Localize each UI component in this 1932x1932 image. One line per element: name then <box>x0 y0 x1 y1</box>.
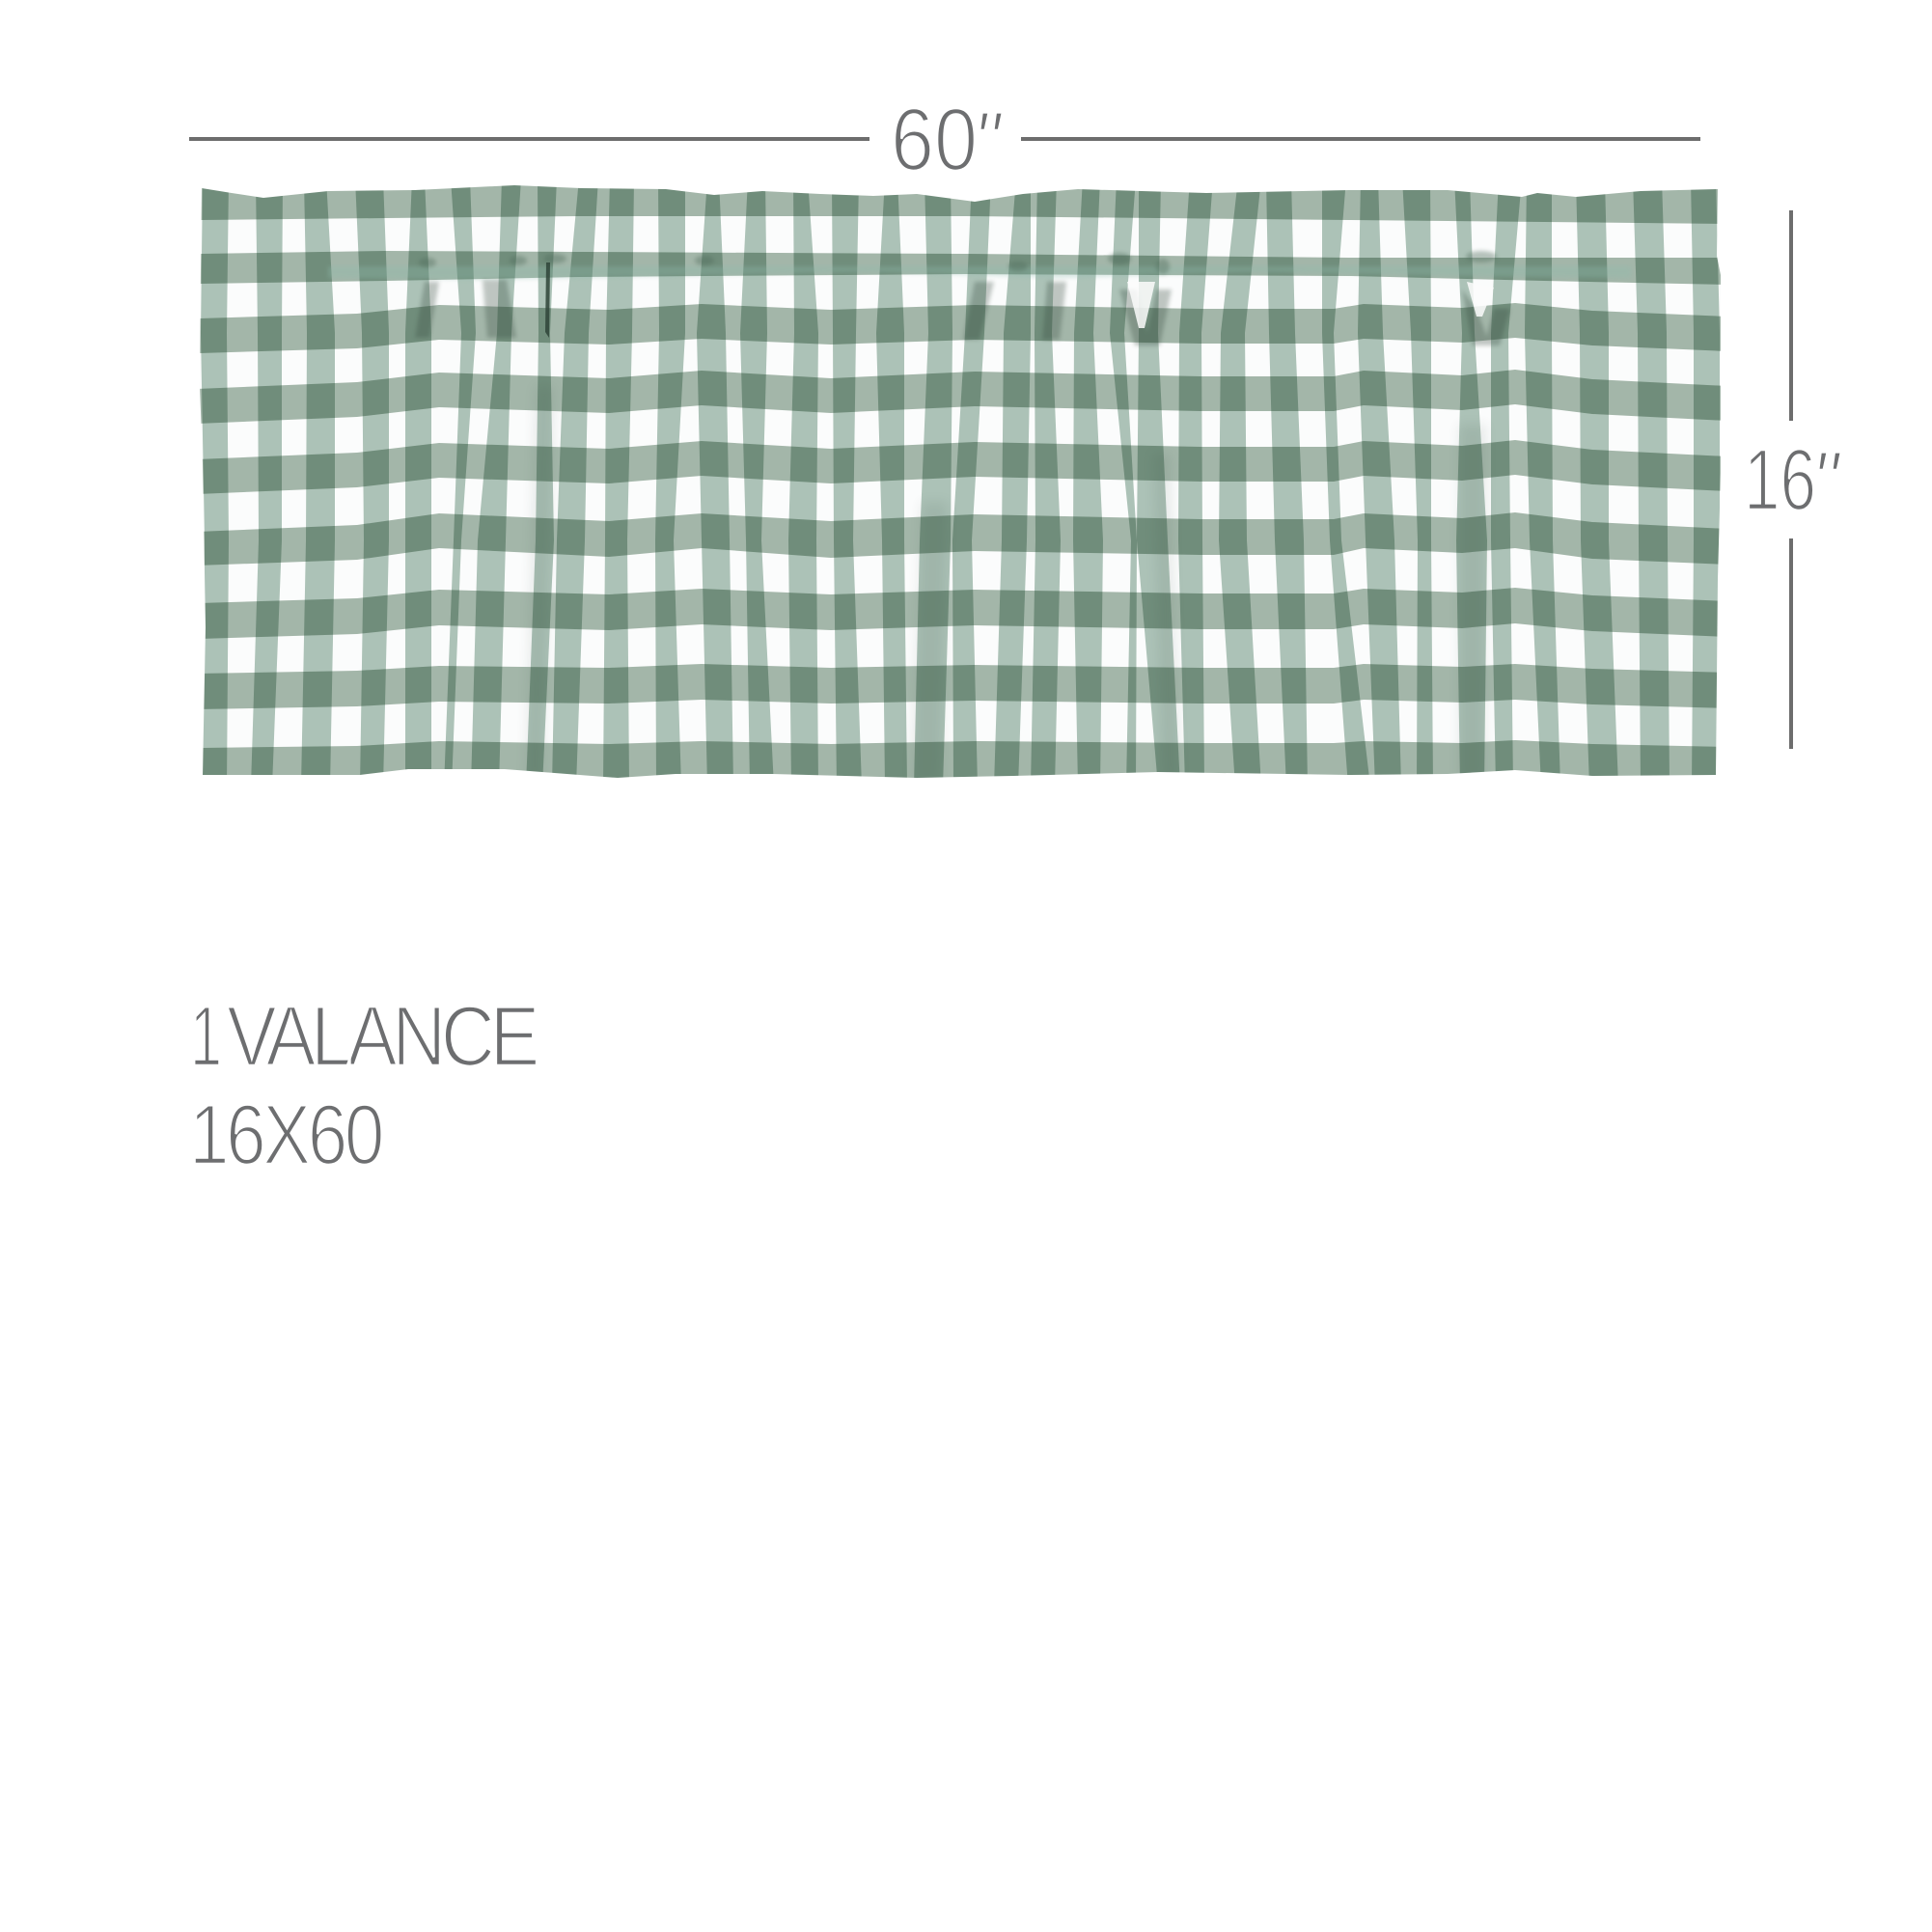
sharp creases and notches <box>545 262 1494 338</box>
product label: size: 16X60 <box>189 1087 382 1182</box>
rod pocket casing band <box>328 266 1631 280</box>
horizontal gingham bands <box>198 179 1727 787</box>
product label: quantity: VALANCE <box>227 988 537 1084</box>
height dimension line: 16 inches <box>1744 210 1841 749</box>
product label: quantity: 1 <box>190 988 222 1084</box>
width dimension line: 60 inches: " <box>973 96 1003 188</box>
casing gather knots <box>419 251 1497 274</box>
width dimension line: 60 inches: 60 <box>891 91 978 189</box>
gingham valance curtain <box>193 174 1737 791</box>
vertical gingham bands <box>201 179 1720 787</box>
gathered fold shadows <box>415 280 1510 345</box>
height dimension line: 16 inches: " <box>1811 435 1841 528</box>
height dimension line: 16 inches: 16 <box>1744 432 1816 529</box>
long drape shading <box>525 411 1488 743</box>
width dimension line: 60 inches <box>189 91 1700 189</box>
